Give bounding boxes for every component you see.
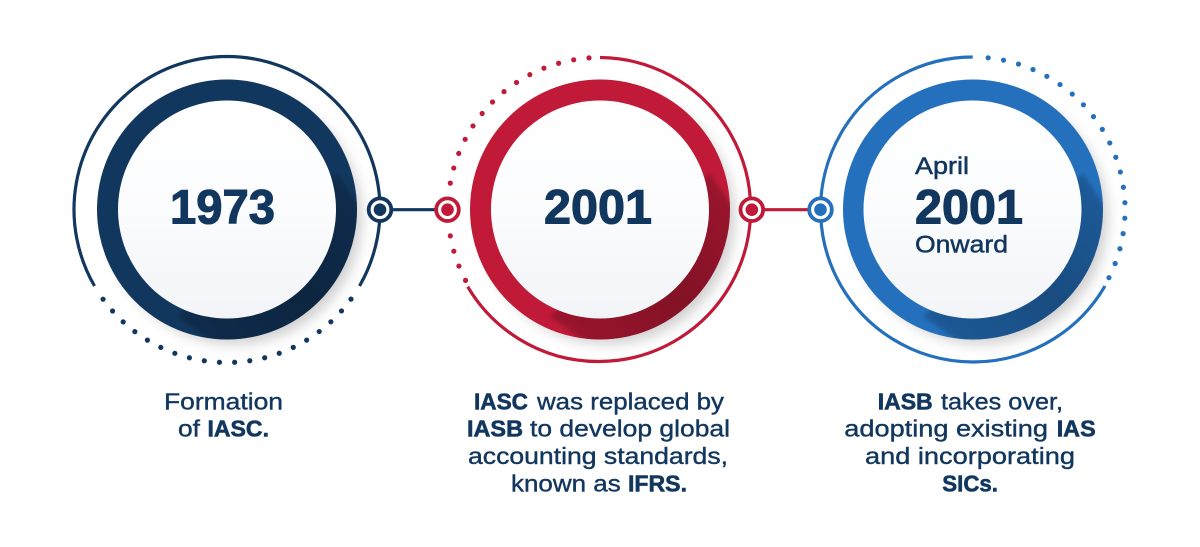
node red right [740,198,763,221]
connector: red to blue [740,198,832,221]
upper dotted arc 2001 [450,58,589,183]
text block: IASB takes over: IAS [1057,416,1096,442]
text block: IASC replaced by IASB [467,388,730,497]
timeline infographic [72,54,1128,492]
long shadow April 2001 [923,174,1103,340]
year 2001: 2001 [544,181,652,234]
thick ring 1973 [97,80,357,340]
dotted arc April 2001 [988,58,1125,278]
text block: Formation of IASC: Formation [164,388,283,414]
ring shadow April 2001 [855,92,1107,344]
text block: IASB takes over: takes over, [941,388,1063,414]
lower dotted arc 2001 [450,236,466,280]
dotted arc 1973 [103,299,351,362]
text block: IASC replaced by IASB: IFRS. [628,471,687,497]
node red left [436,198,459,221]
connector line red [764,208,809,211]
text block: IASB takes over [844,388,1096,497]
ring shadow 1973 [109,92,361,344]
year 2001: 2001 [915,182,1023,235]
text block: IASC replaced by IASB: IASB [467,416,523,442]
long shadow 2001 [550,174,730,340]
text block: Formation of IASC [164,388,283,442]
white disc 2001 [491,100,709,318]
text block: IASB takes over: adopting existing [844,416,1048,442]
connector: navy to red [369,198,459,221]
outer arc April 2001 [821,57,1105,362]
node navy [369,198,391,221]
text block: IASB takes over: SICs. [942,471,998,497]
panel: April 2001 Onward circle [820,55,1128,364]
date text April 2001 Onward [915,153,1023,258]
text block: IASC replaced by IASB: accounting standards, [468,443,728,469]
word Onward: Onward [915,231,1008,258]
month April: April [915,153,969,180]
node blue [809,198,832,221]
text block: IASB takes over: IASB [878,388,933,414]
text block: IASC replaced by IASB: to develop global [530,416,730,442]
text block: IASB takes over: and incorporating [865,443,1075,469]
white disc 1973 [118,100,336,318]
panel: 2001 circle [448,55,752,364]
text block: IASC replaced by IASB: was replaced by [536,388,724,414]
long shadow 1973 [178,175,357,340]
text block: Formation of IASC: IASC. [208,416,269,442]
text block: Formation of IASC: of [178,416,201,442]
white disc April 2001 [864,100,1082,318]
outer arc 2001 [468,58,751,361]
year 1973: 1973 [170,181,275,234]
text block: IASC replaced by IASB: known as [511,471,621,497]
ring shadow 2001 [482,92,734,344]
connector line navy [392,208,436,211]
thick ring 2001 [470,80,730,340]
panel: 1973 circle [72,54,382,365]
outer arc 1973 [74,56,380,286]
thick ring April 2001 [843,80,1103,340]
text block: IASC replaced by IASB: IASC [474,388,528,414]
